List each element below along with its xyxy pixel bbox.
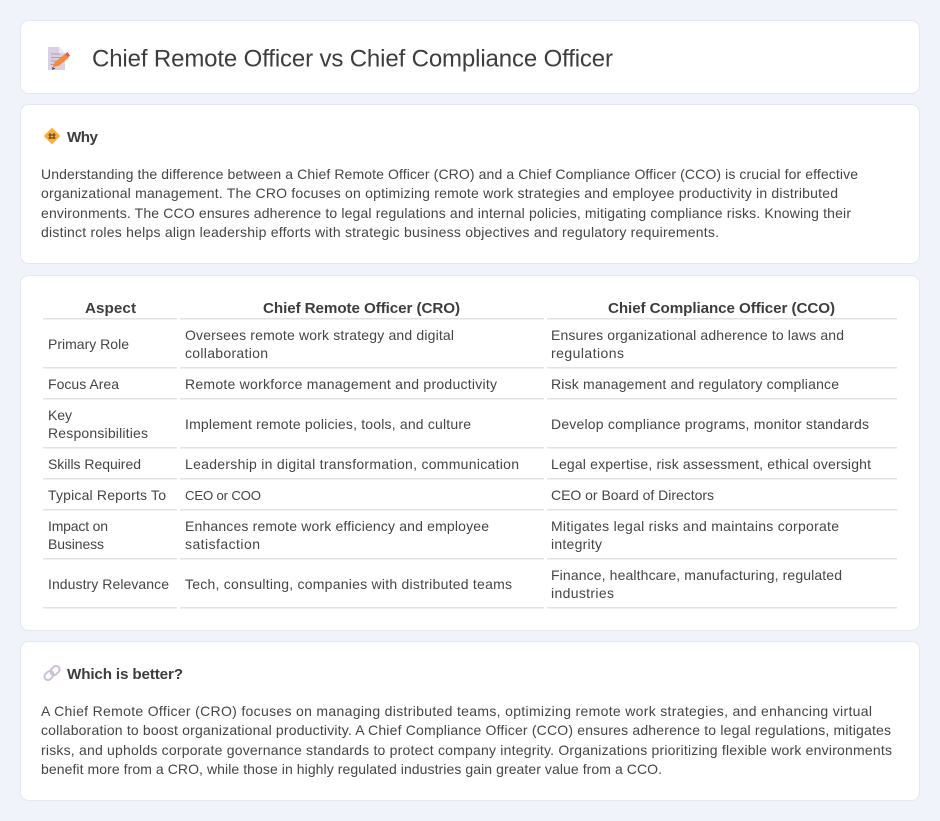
panel: comparison table: [20, 276, 920, 630]
text block: why paragraph: [41, 166, 858, 240]
row: skills required: Skills Required: [48, 456, 141, 472]
row: key responsibilities: Responsibilities: [48, 425, 148, 441]
row: typical reports to: Typical Reports To: [48, 487, 166, 503]
row: industry relevance: Finance, healthcare, manufacturing, regulated: [551, 567, 842, 583]
row: industry relevance: [48, 567, 842, 601]
row: impact on business: Enhances remote work efficiency and employee: [185, 518, 489, 534]
table header: Chief Remote Officer (CRO): [263, 300, 460, 317]
row: key responsibilities: Implement remote policies, tools, and culture: [185, 416, 471, 432]
row: primary role: collaboration: [185, 345, 268, 361]
panel: why: [20, 104, 920, 264]
row: typical reports to: CEO or Board of Directors: [551, 487, 714, 503]
row: impact on business: Business: [48, 536, 104, 552]
row: key responsibilities: [48, 407, 869, 441]
row: skills required: [48, 456, 871, 472]
text block: which is better paragraph: risks, and upholds corporate governance standards to protect company integrity. Organizations prioritizing flexible work environments: [41, 742, 892, 758]
icon: diamond sign: [44, 128, 60, 144]
text block: why paragraph: distinct roles helps align leadership efforts with strategic business objectives and regulatory requirements.: [41, 224, 719, 240]
row: primary role: Ensures organizational adherence to laws and: [551, 327, 844, 343]
row: skills required: Legal expertise, risk assessment, ethical oversight: [551, 456, 871, 472]
text block: which is better paragraph: benefit more from a CRO, while those in highly regulated industries gain greater value from a CCO.: [41, 761, 662, 777]
heading: which is better: Which is better?: [67, 666, 183, 683]
row: industry relevance: Tech, consulting, companies with distributed teams: [185, 576, 512, 592]
row: typical reports to: [48, 487, 714, 503]
row: skills required: Leadership in digital transformation, communication: [185, 456, 519, 472]
panel: which is better: [20, 642, 920, 800]
text block: which is better paragraph: collaboration to boost organizational productivity. A Chief Compliance Officer (CCO) ensures adherence to legal regulations, mitigates: [41, 722, 891, 738]
row: focus area: [48, 376, 839, 392]
row: impact on business: satisfaction: [185, 536, 260, 552]
text block: why paragraph: organizational management. The CRO focuses on optimizing remote work strategies and employee productivity in distributed: [41, 185, 838, 201]
table header: [85, 300, 835, 317]
text block: why paragraph: Understanding the difference between a Chief Remote Officer (CRO) and a Chief Compliance Officer (CCO) is crucial for effective: [41, 166, 858, 182]
panel: title: [20, 20, 920, 94]
row: industry relevance: Industry Relevance: [48, 576, 169, 592]
row: focus area: Risk management and regulatory compliance: [551, 376, 839, 392]
row: industry relevance: industries: [551, 585, 614, 601]
row: impact on business: [48, 518, 839, 552]
text block: which is better paragraph: A Chief Remote Officer (CRO) focuses on managing distributed teams, optimizing remote work strategies, and enhancing virtual: [41, 703, 872, 719]
row: primary role: [48, 327, 844, 361]
row: primary role: regulations: [551, 345, 624, 361]
table header: Aspect: [85, 300, 136, 317]
icon: document with pencil: [48, 47, 70, 70]
row: key responsibilities: Develop compliance programs, monitor standards: [551, 416, 869, 432]
row: typical reports to: CEO or COO: [185, 488, 261, 503]
row: impact on business: Mitigates legal risks and maintains corporate: [551, 518, 839, 534]
row: focus area: Focus Area: [48, 376, 119, 392]
row: focus area: Remote workforce management and productivity: [185, 376, 497, 392]
text block: why paragraph: environments. The CCO ensures adherence to legal regulations and internal policies, mitigating compliance risks. Knowing their: [41, 205, 851, 221]
row: primary role: Oversees remote work strategy and digital: [185, 327, 454, 343]
table header: Chief Compliance Officer (CCO): [608, 300, 835, 317]
row: key responsibilities: Key: [48, 407, 72, 423]
row: primary role: Primary Role: [48, 336, 129, 352]
row: impact on business: Impact on: [48, 518, 108, 534]
title text: Chief Remote Officer vs Chief Compliance Officer: [92, 46, 613, 72]
icon: chain link: [43, 664, 61, 682]
row: impact on business: integrity: [551, 536, 602, 552]
text block: which is better paragraph: [41, 703, 892, 777]
heading: why: Why: [67, 129, 99, 146]
